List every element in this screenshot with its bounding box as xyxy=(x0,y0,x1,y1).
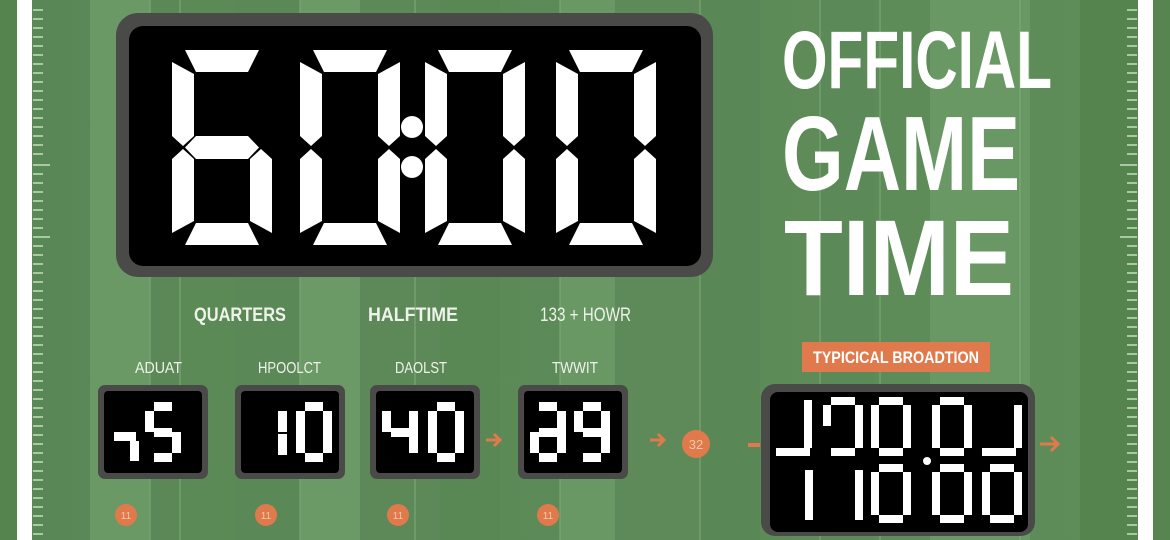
small clock 1 xyxy=(98,385,208,479)
small clock 3 xyxy=(370,385,480,479)
small clock labels: DAOLST xyxy=(395,360,447,377)
connector dash xyxy=(748,443,760,447)
digit 6 xyxy=(172,50,272,245)
orange badges xyxy=(115,504,559,526)
row 2 xyxy=(805,464,1022,523)
title: OFFICIAL xyxy=(782,15,1052,106)
digit 0 xyxy=(425,50,525,245)
arrow 1 xyxy=(486,434,500,446)
small clock labels xyxy=(135,360,598,377)
row 1 xyxy=(776,397,1022,456)
small clock 2 xyxy=(235,385,345,479)
orange badges: 11 xyxy=(393,511,404,522)
arrow 3 xyxy=(1040,437,1058,451)
title: GAME xyxy=(782,95,1020,213)
orange badges: 11 xyxy=(261,511,272,522)
section labels: HALFTIME xyxy=(368,305,458,326)
sideline right xyxy=(1120,0,1153,540)
sideline left xyxy=(17,0,50,540)
small clock labels: HPOOLCT xyxy=(258,360,321,377)
colon xyxy=(401,116,423,178)
title xyxy=(782,15,1052,318)
orange badges: 11 xyxy=(543,511,554,522)
orange badges: 11 xyxy=(121,511,132,522)
main clock 60:00 xyxy=(116,13,713,277)
digit 0 xyxy=(300,50,400,245)
broadcast label: TYPICICAL BROADTION xyxy=(813,348,979,367)
small clock labels: ADUAT xyxy=(135,360,182,377)
title: TIME xyxy=(784,197,1014,318)
orange badge 32 xyxy=(682,430,710,458)
broadcast clock xyxy=(761,384,1035,536)
section labels xyxy=(194,305,631,326)
small clock labels: TWWIT xyxy=(552,360,598,377)
section labels: QUARTERS xyxy=(194,305,286,326)
arrow 2 xyxy=(650,434,664,446)
orange badge 32: 32 xyxy=(689,437,703,452)
small clock 4 xyxy=(518,385,628,479)
section labels: 133 + HOWR xyxy=(540,305,631,326)
digit 0 xyxy=(556,50,656,245)
broadcast label xyxy=(802,342,990,372)
